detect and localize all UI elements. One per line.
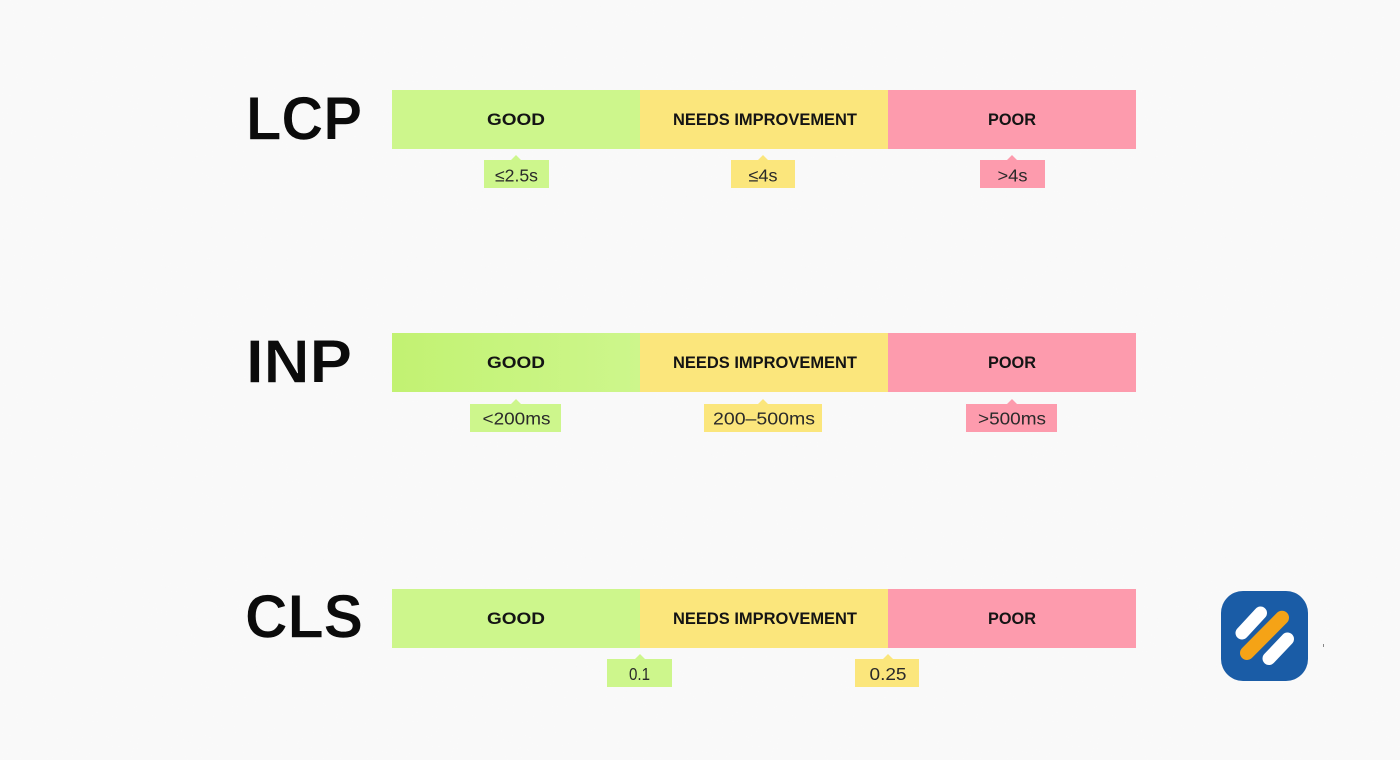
panel: CLS row (245, 582, 1136, 687)
tag: LCP needs improvement threshold (731, 155, 795, 188)
segment: CLS needs improvement (640, 589, 888, 648)
tag: INP poor threshold: >500ms (978, 408, 1046, 428)
segment: INP poor (888, 333, 1136, 392)
tag: INP needs improvement threshold (704, 399, 822, 432)
tag: INP good threshold: <200ms (482, 408, 551, 428)
tag: LCP good threshold (484, 155, 549, 188)
heading: INP: INP (246, 328, 352, 396)
segment: LCP good (392, 90, 640, 149)
segment: INP needs improvement: NEEDS IMPROVEMENT (673, 353, 858, 372)
tag: INP poor threshold (966, 399, 1057, 432)
panel: LCP row (246, 84, 1136, 188)
segment: LCP poor (888, 90, 1136, 149)
tag: LCP good threshold: ≤2.5s (495, 166, 538, 186)
segment: LCP good: GOOD (487, 110, 545, 129)
tag: CLS good threshold: 0.1 (629, 664, 650, 684)
segment: CLS poor: POOR (988, 609, 1036, 628)
segment: CLS good: GOOD (487, 609, 545, 628)
icon: logo (1221, 591, 1308, 681)
segment: LCP poor: POOR (988, 110, 1036, 129)
segment: INP needs improvement (640, 333, 888, 392)
tag: INP needs improvement threshold: 200–500ms (713, 408, 815, 428)
panel: INP row (246, 328, 1136, 432)
segment: CLS poor (888, 589, 1136, 648)
segment: INP good (392, 333, 640, 392)
segment: CLS needs improvement: NEEDS IMPROVEMENT (673, 609, 858, 628)
tag: LCP poor threshold (980, 155, 1045, 188)
heading: CLS: CLS (245, 582, 363, 650)
segment: LCP needs improvement (640, 90, 888, 149)
tag: CLS poor threshold: 0.25 (870, 664, 906, 684)
segment: INP good: GOOD (487, 353, 545, 372)
tag: LCP needs improvement threshold: ≤4s (748, 166, 778, 186)
tag: LCP poor threshold: >4s (998, 166, 1028, 186)
tag: CLS poor threshold (855, 654, 919, 687)
segment: INP poor: POOR (988, 353, 1036, 372)
tag: INP good threshold (470, 399, 561, 432)
segment: CLS good (392, 589, 640, 648)
heading: LCP: LCP (246, 84, 362, 152)
segment: LCP needs improvement: NEEDS IMPROVEMENT (673, 110, 858, 129)
tag: CLS good threshold (607, 654, 672, 687)
